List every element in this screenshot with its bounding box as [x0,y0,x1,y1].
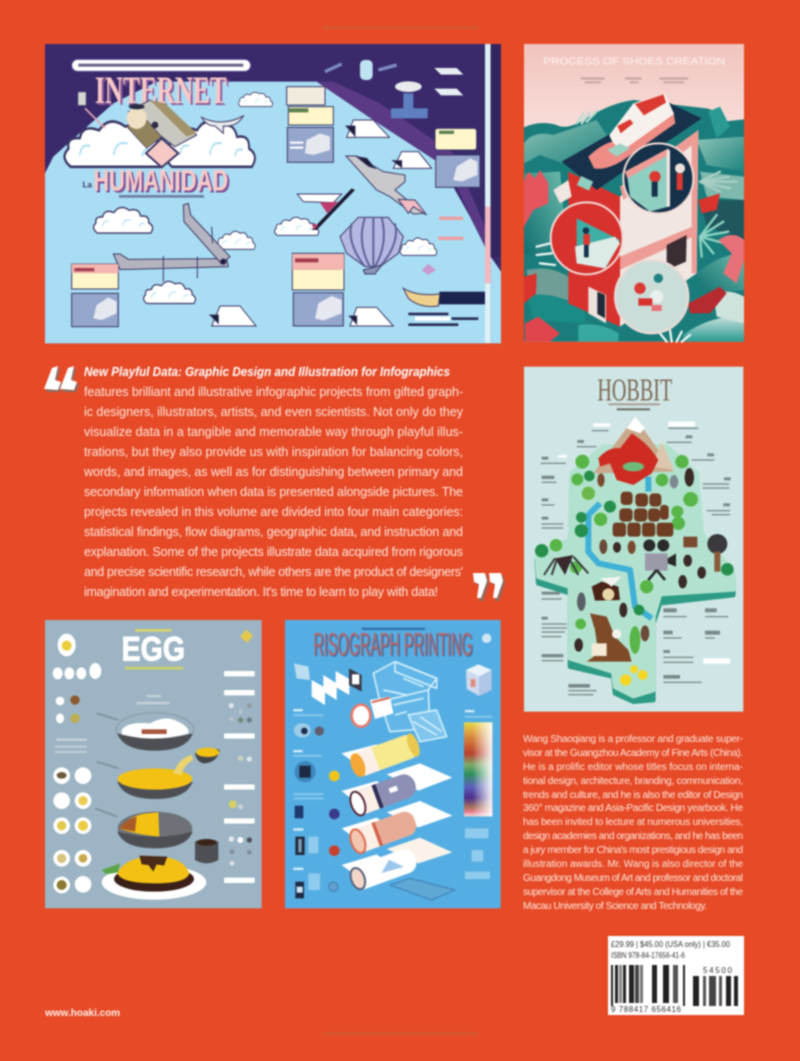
main body text: trations, but they also provide us with inspiration for balancing colors, [84,445,463,459]
icon column: egg plates [53,767,91,893]
author biography: tional design, architecture, branding, communication, [523,776,743,787]
roller 3: red [329,809,452,863]
hot air balloon [340,217,403,274]
poster title: HOBBIT [597,373,672,408]
ink drum small [352,697,393,727]
author biography: has been invited to lecture at numerous universities, [523,817,743,828]
faint spine marks [323,26,478,1035]
poster title [597,373,672,410]
circle: left detail [551,202,623,274]
main body text: projects revealed in this volume are divided into four main categories: [84,505,463,519]
panel: process of shoes creation [524,44,744,342]
building: left face [568,172,620,327]
roof [562,102,702,190]
main body text: visualize data in a tangible and memorable way through playful illus- [84,425,463,439]
circle: lower detail [615,260,688,333]
author biography: He is a prolific editor whose titles focus on interna- [523,762,743,773]
sauce cup [195,839,218,863]
heading: humanidad: La [83,181,93,190]
author biography: Guangdong Museum of Art and professor and doctoral [523,873,743,884]
author biography: trends and culture, and he is also the editor of Design [523,790,743,801]
heading: internet: INTERNET [95,68,227,112]
building door [588,235,687,323]
bilbo at desk [587,613,632,662]
sub labels [581,77,688,83]
panel: hobbit infographic [524,367,743,712]
heading: internet [95,68,229,114]
red and pink leaves [524,170,744,342]
main body text: ic designers, illustrators, artists, and even scientists. Not only do they [84,405,464,419]
heading: humanidad [83,164,230,199]
right column labels [224,671,255,883]
panel: risograph printing infographic: RISOGRAPH PRINTING [313,626,473,663]
poster title [313,626,491,664]
plated omurice [102,856,206,900]
gold coins [620,665,648,686]
isbn line: ISBN 978-84-17656-41-6 [611,950,685,960]
tree and spider [544,534,727,575]
master stencil sheets [294,663,362,705]
author biography: Wang Shaoqiang is a professor and graduate super- [523,734,743,745]
barcode digits: 9 788417 656416 [611,1005,682,1014]
foliage background [524,100,744,342]
tiny captions [55,695,169,753]
printer outline [373,662,447,742]
data tags [210,120,432,326]
rocket wing illustration [346,156,427,215]
icon column: egg anatomy [53,634,101,723]
left column icons [294,723,324,898]
paper tray cube [466,664,492,696]
pink captions [438,217,463,240]
fern spikes [537,111,737,342]
main body text: features brilliant and illustrative infographic projects from gifted graph- [84,385,463,399]
main body text: secondary information when data is presented alongside pictures. The [84,485,463,499]
heading: humanidad: HUMANIDAD [95,166,230,199]
author biography: 360° magazine and Asia-Pacific Design yearbook. He [523,803,743,814]
bird and legend [403,264,485,326]
space station icon [325,60,463,118]
colour swatches chart [464,722,492,816]
hobbit hole [592,577,622,601]
river [588,477,652,618]
closing quote mark [473,573,505,601]
author biography: Macau University of Science and Technology. [523,901,707,912]
opening quote mark [44,366,79,392]
pan 3: folded omelette [95,808,193,848]
panel: internet and humanity infographic [45,44,501,343]
main body text [83,365,464,599]
sky area [45,82,485,343]
publisher url: www.hoaki.com [44,1008,120,1019]
panel: risograph printing infographic: RISOGRAPH PRINTING [315,627,474,664]
paper plane illustration [297,188,355,230]
poster title: PROCESS OF SHOES CREATION [543,57,725,68]
circle: upper detail [623,143,693,213]
info boxes: bottom left [72,264,118,327]
author biography: a jury member for China's most prestigious design and [523,845,743,856]
author biography [523,734,743,912]
poster title: EGG [122,631,185,669]
roller 2: navy [329,771,452,827]
main body text: statistical findings, flow diagrams, geographic data, and instruction and [84,525,463,539]
price code: 54500 [703,966,733,975]
author biography: design academies and organizations, and he has been [523,831,743,842]
data labels [541,422,731,695]
panel: risograph printing infographic [285,620,501,908]
poster title [122,629,253,670]
main body text: imagination and experimentation. It's time to learn to play with data! [84,585,438,599]
info boxes: top right [435,128,480,187]
shoe [588,93,675,169]
mountains [593,417,674,473]
heading: book title: New Playful Data: Graphic Design and Illustration for Infographics [84,365,450,379]
pink bands [620,130,698,273]
map base shadow [537,453,733,702]
satellite illustration [127,100,243,167]
main body text: explanation. Some of the projects illustrate data acquired from rigorous [84,545,463,559]
small captions [293,709,492,890]
price line: £29.99 | $45.00 (USA only) | €35.00 [611,939,730,949]
author biography: visor at the Guangzhou Academy of Fine Arts (China). [523,748,743,759]
plane arm illustration [113,203,230,282]
building: right face [620,130,698,327]
panel: egg infographic [45,620,262,908]
characters [574,468,706,652]
right column icons [229,703,252,866]
pan 2: egg pour [97,748,220,799]
roller 4: white [329,846,455,900]
hand and leaves [553,176,593,203]
barcode block [608,936,744,1015]
map land [537,447,733,696]
pan 1: rice [97,713,194,751]
clouds: main pair [65,121,255,167]
dwarves group [613,492,673,537]
info boxes: top centre [287,87,333,162]
main body text: and precise scientific research, while others are the product of designers' [84,565,463,579]
heading: humanidad: HUMANIDAD [93,164,228,197]
info boxes: bottom centre [292,253,344,326]
barcode bars [611,965,738,1006]
title pill [72,59,251,71]
icon: selfie stick [78,92,105,128]
clouds: scattered [94,92,437,303]
dragon [598,433,658,485]
author biography: illustration awards. Mr. Wang is also director of the [523,859,743,870]
trees [535,455,734,654]
author biography: supervisor at the College of Arts and Humanities of the [523,887,743,898]
heading: internet: INTERNET [97,70,229,114]
roller 1: yellow [329,732,452,791]
main body text: words, and images, as well as for distinguishing between primary and [83,465,463,479]
film camera [643,539,676,580]
